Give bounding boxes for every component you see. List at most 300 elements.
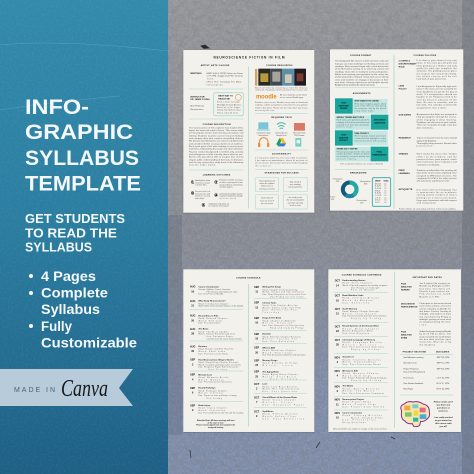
schedule left column: Read: Memento Article [198,376,228,379]
course policies: Topics of research from the class should [417,137,457,140]
feature bullet list: Complete [41,284,108,300]
important due dates: midnight, and reply to at least [419,313,451,316]
schedule right column: Due Friday [270,379,297,381]
course policies: publication. [417,145,434,148]
schedule right column: OCT [254,410,260,413]
contact callout: BEST WAY TO [218,94,233,97]
schedule continued: Reply by Friday [351,318,381,320]
schedule right column: What is ADD [262,346,276,349]
strategies for success: Stay on top of [290,180,301,183]
schedule right column: Writing The Script [262,286,281,289]
course policies: Further details on each policy and more in the course syllabus. [399,207,457,210]
grading scale table: D 60-72 [375,200,380,202]
important due dates: the deadline. [419,343,436,346]
schedule right column: SEP [254,286,259,289]
schedule continued: 14 [336,284,339,287]
course format: of the film before moving on to some key scenes and [335,68,389,71]
grade breakdown donut chart: Presentation [357,199,367,202]
learning outcomes: in fiction films [195,184,207,187]
closing note [434,401,453,428]
schedule note: at the start of term [208,421,224,424]
schedule right column: Thursday [262,312,279,314]
project due dates table: Final Paper [403,388,414,391]
schedule right column: Due: Post Discussion Comments and Questions [262,354,306,357]
closing note: you all! [440,426,447,428]
grade breakdown donut chart: Assignments [360,180,371,183]
assignment row 2: QUESTIONS [374,123,386,125]
assignment row 1: WHAT MAKES THE CINEMA [354,100,379,103]
instructor details [190,96,210,111]
learning outcomes: neuroscience and [195,193,210,195]
course policies: sent by email in advance of the [417,98,457,101]
schedule right column: Drugs & The Brain [262,318,282,320]
course description: By the end, you will be able to analyze how cinema [189,156,244,159]
grading scale table: B+ 87-89 [375,188,381,190]
grade breakdown donut chart: BREAKDOWN [350,172,367,175]
strategies for success: and show up ready [288,202,303,204]
course policies: assignments. Use it often. [417,106,447,109]
schedule left column: Watch: Short Video [198,350,225,353]
assignments [335,92,388,166]
project due dates table: Identify Team [403,362,417,365]
assignment row 2 [335,115,388,130]
subtitle: TO READ THE [25,226,117,240]
schedule continued: Due: Presentation [342,419,376,422]
schedule note [196,419,235,429]
schedule right column: Watch: Her, film discussion [262,388,299,391]
grading scale table: B 83-86 [375,190,380,192]
schedule continued: Read: Language Articles [342,341,382,344]
important due dates: due dates. Post by Tuesday at [419,310,451,313]
course description: COURSE DESCRIPTION [203,124,231,126]
course policies: Thoroughly bring research. A week after [417,142,457,145]
moodle logo: made to due dates. Please see me if you have any issues [255,106,308,109]
grading scale table: 2.3 [384,195,387,197]
strategies for success: you are unsure [261,203,273,205]
schedule left column: 30 [191,350,195,353]
learning outcomes: structures shown [195,181,210,184]
schedule left column: Due: Paper on how pathways change [198,394,237,397]
schedule continued: Watch: Clips and complete the reading response [342,284,387,287]
schedule right column: Watch: Scenes and film summaries [262,291,304,294]
course policies: date. Be sure to consider, and no [417,101,457,104]
strategies for success: the class participation [287,199,304,202]
course policies: feelings on a discussion board. [417,196,457,199]
course details: MEETINGS [190,73,202,75]
course policies: DUE DATES [399,113,412,116]
schedule right column: Due: Post Questions [262,390,297,393]
schedule left column: Read: Storytelling Chapter Excerpts [198,361,238,364]
assignment row 4: PRESENTATION [372,154,387,157]
learning outcomes: written work [219,197,236,200]
important due dates: Submit final exam essay by Moodle [419,330,452,333]
schedule continued: Course Conclusion [342,412,363,414]
schedule right column: OCT [254,383,260,386]
project due dates table: NOV 16, 5PM [437,389,450,391]
schedule right column: 9 [256,415,258,418]
assignment row 1: the semester, due by the end of [354,107,386,110]
project due dates table: NOV 4, 5PM [437,383,450,385]
schedule right column: SEP [254,302,259,305]
schedule left column: AUG [190,286,195,289]
course policies: COURSE & [399,61,410,63]
course description: shapes public understanding of the brain, its diseases, [189,158,244,161]
schedule continued: OCT [335,339,340,342]
important due dates: midnight, posting on each week [419,318,452,321]
learning outcomes: LEARNING OUTCOMES [203,174,231,177]
important due dates: DISCUSSION [401,304,415,306]
course policies: RULE [399,66,405,68]
instructor details: DR. JAMIE YOUNG [190,98,210,101]
schedule left column: How Neuroscience Shapes Stories [198,358,235,361]
important due dates: as assigned during the term. [419,321,451,324]
schedule right column: Visual Effects of the Human Brain [262,396,298,399]
schedule left column: Preview: Syllabus, Course Overview [198,289,231,291]
schedule right column: SEP [254,371,259,374]
important due dates: Due Date. Due dates are [419,287,451,290]
assignments: Full assignment details are online at Moodle [340,163,383,166]
grading scale table: F 0-59 [375,202,379,204]
course format: The designated film class in a brief overview, asks and [335,60,389,63]
schedule left column: Watch: Inception and make notes on scenes [198,363,241,366]
page 2: format and policies [329,49,463,211]
schedule left column: Due: Post Questions [198,322,220,325]
schedule left column: Read: Neurons and How They Fire [198,349,233,351]
important due dates: PARTICIPATION [401,306,418,309]
course description: and the wider world. [189,164,216,167]
course description: and the way researchers study them in the laboratory [189,161,244,164]
schedule left column: Watch: Eternal Sunshine and write [198,333,235,336]
grading scale table: 0.0 [384,202,387,204]
important due dates: by 11:59 PM on dates. The [419,333,452,336]
learning outcomes [191,174,243,208]
course format [335,54,389,87]
schedule left column: Consider how the movie shows memory [207,337,242,340]
course policies: PEER [399,170,405,172]
schedule continued: Reply by Friday [351,380,381,382]
schedule left column: SEP [190,387,195,390]
required tech icons: Smartphone [258,134,268,137]
grading scale table: C+ 77-79 [375,195,381,197]
course format: readings. Most sessions begin with a short discussion [335,65,389,68]
course policies: setting and be mindful of others [417,194,457,197]
important due dates: PAPERS [401,289,410,292]
assignment row 4: overall clarity. [337,157,357,160]
schedule right column: Due: Post Reflection [262,417,304,420]
learning outcomes: Identify basic brain [195,179,210,182]
course policies: process of class, pass projects, check [417,158,458,161]
important due dates: Film choices are listed [419,293,451,296]
assignment row 3: PROJECT [339,140,349,142]
course resources: COURSE RESOURCES [266,65,293,67]
strategies for success: your readings [290,184,301,186]
course policies: It is class is your chance to try new [417,59,457,62]
accessibility: the semester. [255,164,272,167]
course format: Before each meeting, post questions on the course site [335,73,389,76]
assignment row 3: FILM [342,135,346,137]
assignment row 2: respond to at least two classmates [337,123,369,126]
schedule continued: Due: Project Proposal and Group Summary [342,377,386,380]
important due dates: ANALYSIS [401,333,412,336]
course description: No prior science background is needed, only curiosity [189,150,244,153]
important due dates: each week, please check the [419,305,452,308]
moodle logo: readings, submit assignments and check for any updates [255,104,308,107]
schedule left column: Read: Pathways Chapter [198,389,227,392]
course policies: Students enrolled after this meeting will [417,169,457,172]
learning outcomes: Communicate complex science [219,192,243,195]
schedule right column: Due: Response Paper [262,404,304,406]
assignment row 2: before class. [337,127,354,129]
course details: Time [207,79,214,81]
schedule right column: SEP [254,333,259,336]
page 1 title: NEUROSCIENCE FICTION IN FILM [213,55,285,59]
schedule continued: NOV [335,385,340,388]
schedule continued: 2 [337,361,339,364]
schedule continued: NOV [335,370,340,373]
schedule right column: Cinema Tools [262,302,277,304]
course policies: We'll review the class rules. Grades [417,153,457,156]
course policies: and review your peer responses and [417,161,457,164]
strategies for success: viewing our movies [259,188,275,190]
course policies: Deadlines can also serve as your cushion. [417,121,457,124]
grade breakdown donut chart: Participation [333,178,343,181]
feature bullet list: 4 Pages [41,268,96,284]
schedule right column: Read: Effects Articles [262,413,297,416]
contact callout: REACH ME [218,97,230,100]
schedule right column: Due Friday for full credit [270,295,304,298]
schedule left column: Watch: Select scenes and write responses to the prompts [198,305,243,308]
grading scale table: B- 80-82 [375,193,381,195]
schedule left column: 19 [191,290,195,293]
schedule left column: Neural Pathways [198,387,216,390]
important due dates: You'll submit film analysis on [419,282,451,285]
course policies: LATE [399,85,405,88]
learning outcomes: using evidence and primary [219,184,243,186]
schedule continued: OCT [335,280,340,283]
moodle logo: Students must access Moodle every week to download [255,101,308,104]
schedule continued: Brain-Machine Links [342,295,364,297]
icon: colourful brain [401,402,430,427]
schedule continued: Watch: Project Clips [342,403,376,406]
learning outcomes: 01 [191,179,195,184]
project due dates table: Peer Review Feedback [403,382,424,385]
project due dates table: First Draft [403,376,414,379]
project due dates table: Document/Storyboard [403,370,426,373]
grading scale table: A 93-100 [375,182,381,185]
important due dates: the due date and has open [419,338,452,341]
course policies: There are no grades through a late due [417,124,457,127]
instructor details: Asst Professor [190,104,205,107]
assignment row 4 [335,147,388,161]
made in Canva ribbon: Canva [61,376,108,402]
title: GRAPHIC [25,121,133,144]
course description [189,124,244,167]
schedule continued: Reply by Friday [351,349,379,351]
assignment row 3: a short film that highlights a topic [354,137,386,140]
course policies: keep growing as a thinker, and only [417,64,458,67]
feature bullet list: Syllabus [41,301,100,317]
required tech icons [256,117,305,147]
schedule continued: NOV [335,399,340,402]
schedule right column: 18 [255,338,259,341]
schedule right column: Read: Articles on Drugs [262,362,297,365]
course policies: Assignments due dates are assigned to [417,113,457,116]
schedule continued: Read: Project Notes [342,401,371,404]
schedule right column: 25 [255,375,259,378]
schedule continued: Watch: Student Films [351,416,383,419]
feature bullet list [29,268,137,350]
made in Canva ribbon: MADE IN [14,387,55,394]
required tech icons: PDF Reader [294,135,305,137]
schedule left column: 28 [191,333,195,336]
schedule continued: 21 [336,313,339,316]
grading scale table: 2.0 [384,197,387,199]
schedule right column: Due: Reflection Post [262,309,298,312]
course policies: most deadlines except for the day of [417,90,457,93]
project due dates table: SEPT 4, 5 PM [437,363,450,365]
feature bullet list: Customizable [41,334,137,350]
course description: at how popular movies show memory, perception, and [189,132,244,135]
schedule right column: Emotion [262,333,272,336]
course description: depict the brain and mind in fiction. This course looks [189,129,243,132]
schedule note: assigned viewing [208,427,223,429]
course policies: ideas. In this class you will grow and [417,62,457,65]
schedule left column: Read: The Brain Chapter [198,330,229,333]
schedule left column: SEP [190,374,195,377]
schedule heading: COURSE SCHEDULE [236,278,261,280]
assignment row 4: answer questions. Grades are based [337,153,369,156]
accessibility [255,152,308,167]
schedule continued: Read: Interface Articles [342,297,379,300]
assignment row 3 [335,130,388,146]
grade breakdown donut chart: 20% [336,181,340,183]
schedule left column: Watch: Film Clips [198,319,222,322]
instructor details: Neuroscience [190,108,204,111]
schedule left column: 21 [191,305,195,308]
schedule continued: Understanding Stories [342,279,366,282]
course policies: DISCRETIONARY [399,62,417,65]
schedule right column: Memory Drugs [262,360,278,362]
important due dates: ANALYSIS [401,286,412,289]
schedule left column: Neurons [198,346,208,348]
course policies: completed 3-4 PM in the video archive [417,177,457,180]
schedule right column: Due: Short Response or Discussion Post [262,293,306,296]
schedule left column: 4 [192,378,194,381]
schedule right column: 20 [255,351,259,354]
schedule continued: Memory in Still [342,369,358,372]
schedule continued: NOV [335,412,340,415]
course resources [255,65,308,92]
title [25,96,141,196]
schedule left column: AUG [190,300,195,303]
grade breakdown donut chart: 30% [364,183,368,185]
important due dates [401,276,452,346]
accessibility: ACCESSIBILITY [272,152,292,155]
schedule continued: Transfer of [342,357,354,359]
contact callout: Email me at for longer [217,106,241,109]
strategies for success: Seek help and [261,198,273,200]
contact callout [214,93,243,116]
schedule continued: NOV [335,356,340,359]
schedule continued: 23 [336,330,339,333]
course policies: happen at all. Requests need to be [417,96,457,99]
moodle logo: moodle [256,95,277,101]
schedule continued: Watch: Still Clips [342,374,371,377]
schedule continued: Due: Post Discussion Comments [342,392,384,395]
schedule right column: Love [262,384,268,386]
assignment row 2: WEEKLY THEMES AND TOPICS [337,116,365,119]
course description: Each week pairs a film with readings in neuroscience [189,145,244,148]
important due dates: Participate in discussion board [419,302,452,305]
schedule right column: Watch: Select Clips [262,415,296,418]
course policies: the student full control! Normally, [417,72,457,75]
learning outcomes: Evaluate scientific accuracy [219,179,243,182]
schedule continued: 4 [337,375,339,378]
schedule continued: Due: Post Discussion Notes [342,363,381,366]
learning outcomes: 02 [214,179,218,184]
grading scale table [372,178,391,206]
schedule right column: Read: Love Brain Articles [262,385,297,388]
schedule left column: Due: Response Paper [207,336,233,338]
schedule right column: 7 [256,401,258,404]
course policies: assigned to 3PM Zoom sessions. The [417,174,457,177]
schedule right column: SEP [254,359,259,362]
schedule left column: 9 [192,409,194,412]
moodle logo: All class materials can be found [280,94,307,97]
strategies for success: before class or [261,186,273,188]
learning outcomes: 04 [214,193,218,198]
schedule continued: OCT [335,325,340,328]
schedule left column: Due Friday [208,369,227,371]
schedule left column: Due: Intro Post on Moodle [198,293,223,296]
schedule continued: Due: Reflection [342,301,369,304]
course policies: is appropriate for an academic [417,191,458,194]
course description: and ethics, followed by discussion and short reflection. [189,148,244,151]
project due dates table [400,350,453,391]
schedule continued: 28 [336,344,339,347]
schedule right column: 11 [255,291,259,294]
course policies: Late Assignments: Especially tight work [417,85,458,88]
schedule continued: Read: Mind Chapter [342,327,379,330]
schedule left column: SEP [190,404,195,407]
schedule continued: Sci-Fi Memory [342,308,358,310]
schedule continued: Read: Matrix Articles [342,387,379,390]
page 4: schedule continued and due dates [328,269,461,432]
learning outcomes: Collaborate with peers on [208,202,229,205]
course policies: and compassion. [417,203,437,205]
assignment row 1 [335,98,388,114]
schedule note: Schedule Note: All class meetings will start [197,419,235,422]
schedule continued: Read: Memory Chapter [342,372,379,375]
grade breakdown donut chart [329,172,371,204]
schedule right column: Read: Aging Brain Chapter [262,373,298,376]
project due dates table: SEPT 25, 5 PM [437,369,450,371]
contact callout: WhatsApp for Quick Answers [217,103,241,106]
project due dates table: SEPT 20, 5 PM [437,357,450,359]
assignment row 1: FILM [342,103,346,105]
schedule left column: Due: Post comments on the film and the reading [198,411,243,414]
course format: own level, sharing experiences and insights openly. [335,81,389,84]
schedule continued: OCT [335,308,340,311]
schedule left column: Read: Selected Chapters [198,317,228,320]
schedule left column: The Brain [198,329,209,331]
schedule right column: 2 [256,388,258,391]
grading scale table: 3.0 [384,190,387,192]
required tech icons: Google Drive [276,135,287,137]
schedule left column: AUG [190,328,195,331]
schedule continued: Any and all films are subject to change as the course evolves. [333,428,388,431]
schedule continued: Due: Project Draft Outline [342,405,384,408]
